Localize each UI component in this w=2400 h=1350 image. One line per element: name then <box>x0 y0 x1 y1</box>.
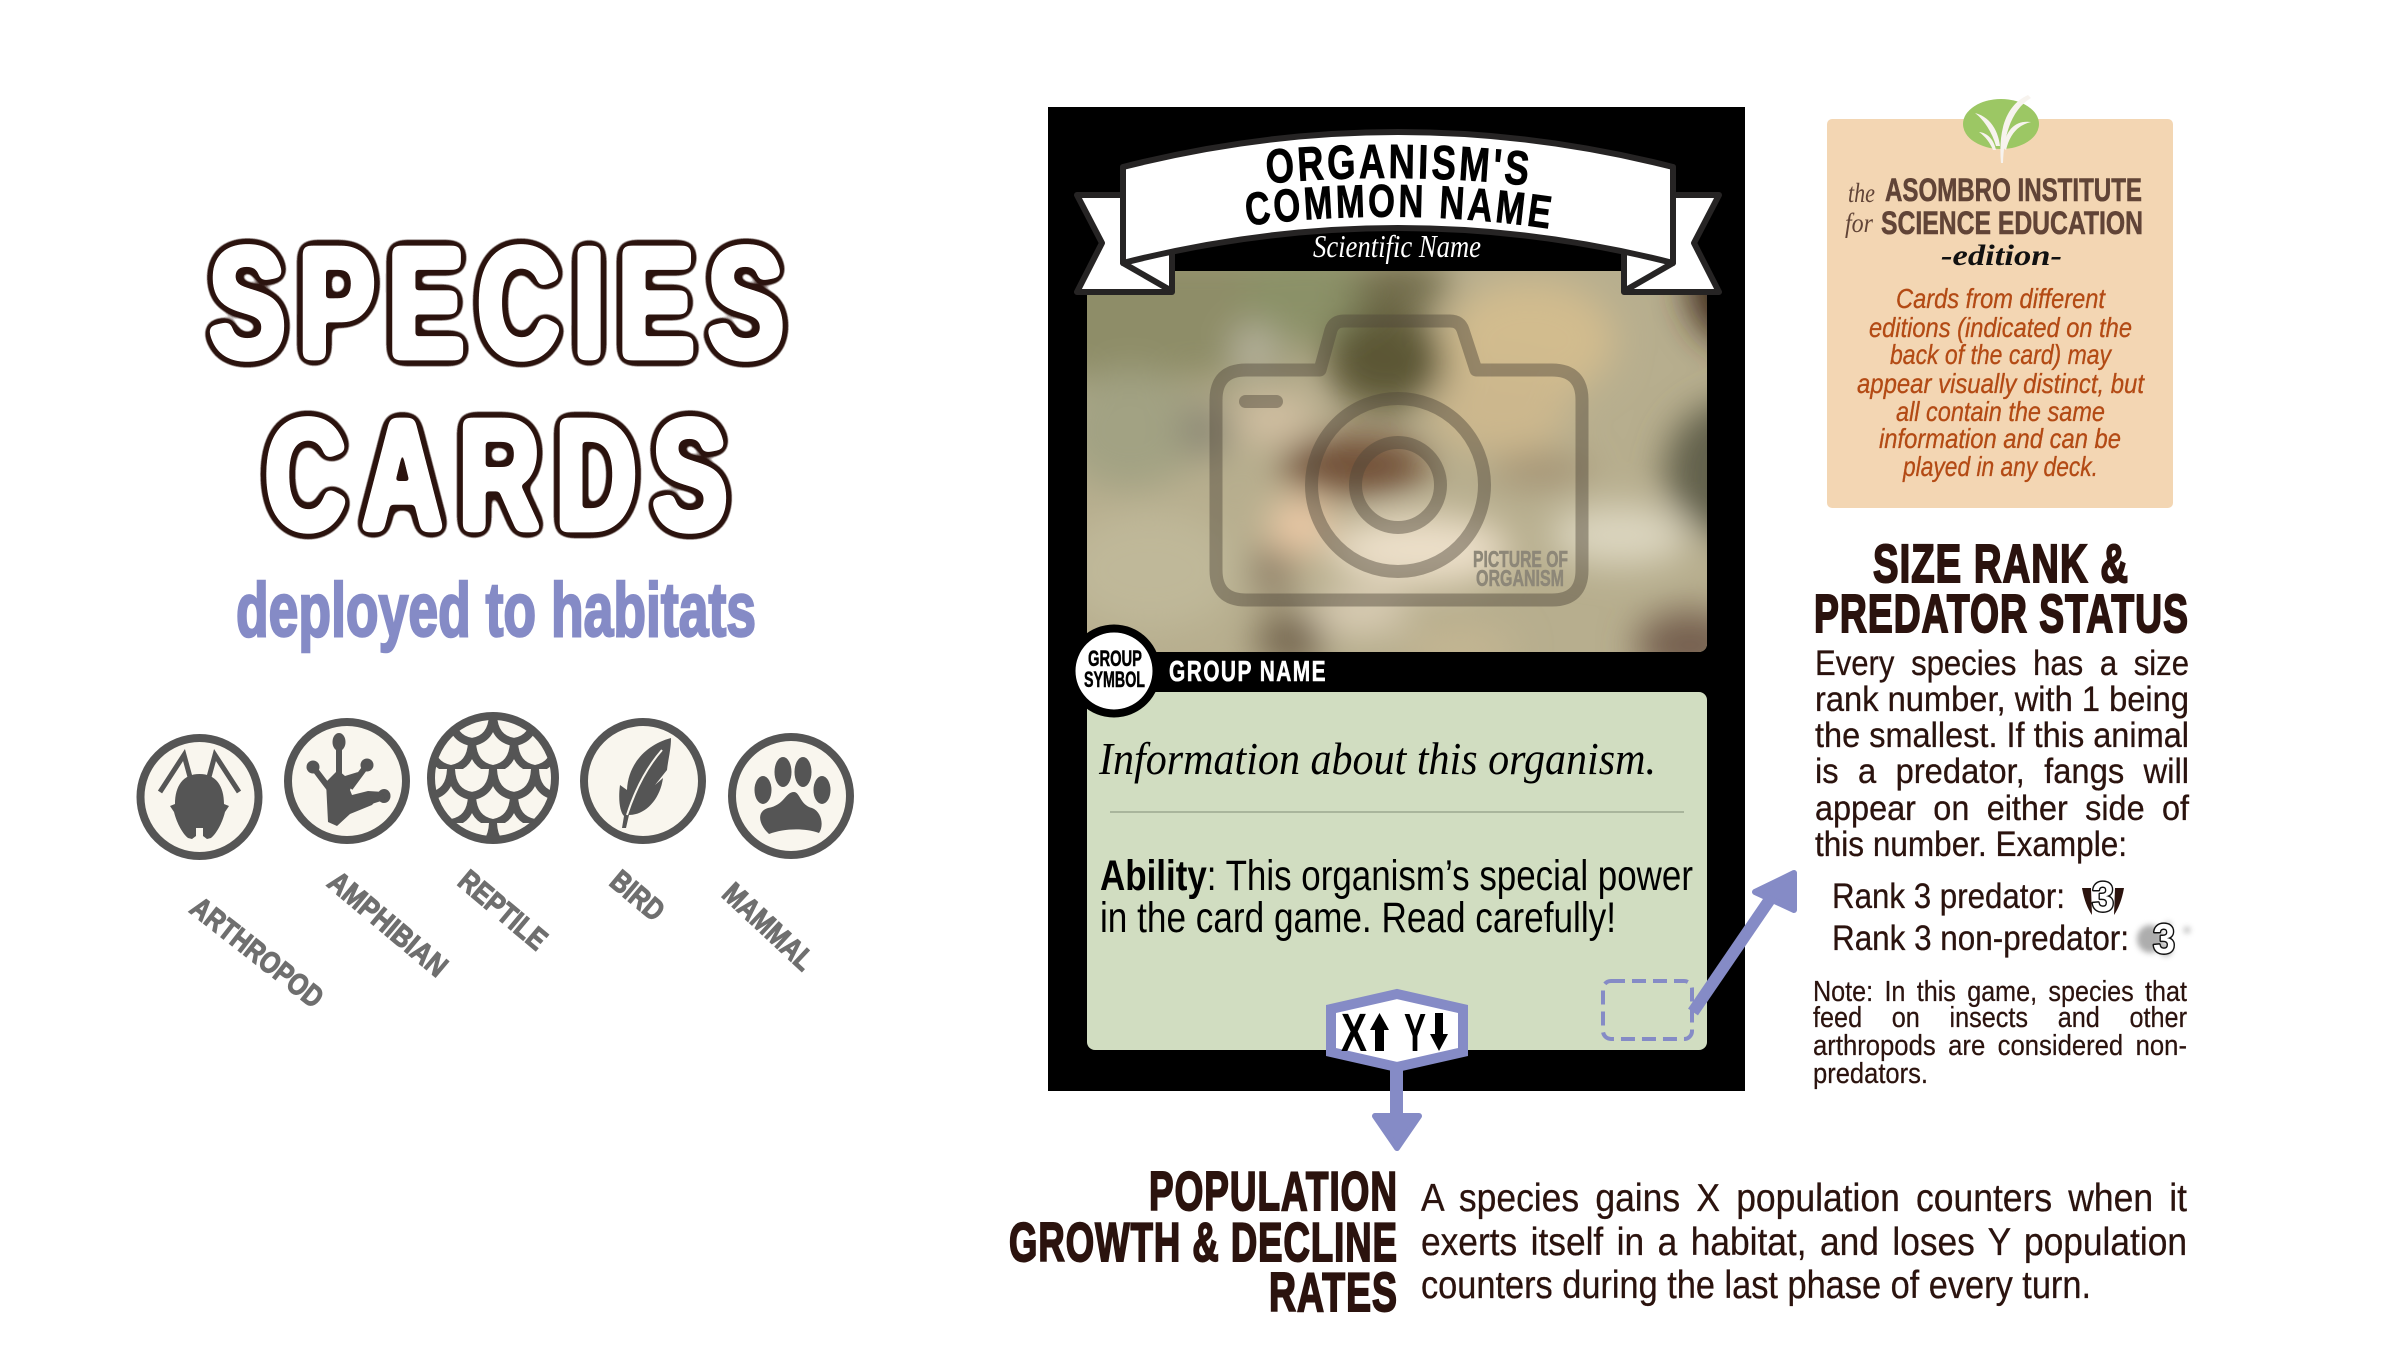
heading: size rank: SIZE RANK & <box>1873 534 2129 594</box>
label: bird: BIRD <box>603 864 671 928</box>
icon: up arrow <box>1370 1013 1389 1051</box>
title: species cards: SPECIES <box>209 216 797 391</box>
ability text <box>1100 852 1693 942</box>
institute name: ASOMBRO INSTITUTE <box>1885 172 2142 208</box>
photo caption: ORGANISM <box>1476 565 1564 591</box>
population badge: X <box>1341 1003 1367 1063</box>
group symbol: GROUP <box>1088 646 1142 671</box>
size rank body: rank number, with 1 being <box>1815 680 2189 719</box>
title: species cards: CARDS <box>265 388 743 563</box>
population body <box>1421 1177 2187 1307</box>
label: reptile: REPTILE <box>452 864 553 957</box>
note: predators. <box>1813 1058 1928 1090</box>
icon: rank 3 with smudge <box>2137 915 2190 962</box>
info panel <box>1087 692 1707 1050</box>
population badge: Y <box>1404 1003 1426 1063</box>
common name: COMMON NAME <box>1246 184 1552 229</box>
icon: reptile scales <box>427 712 559 844</box>
edition note: played in any deck. <box>1902 451 2098 482</box>
heading: population growth <box>1009 1160 1398 1323</box>
institute name <box>1845 172 2143 241</box>
size rank body: appear on either side of <box>1815 789 2189 828</box>
icon: sprout logo <box>1963 95 2039 163</box>
size rank body <box>1815 644 2189 864</box>
note: arthropods are considered non- <box>1813 1030 2187 1062</box>
population body: counters during the last phase of every turn. <box>1421 1264 2091 1307</box>
scientific name: Scientific Name <box>1313 228 1481 264</box>
heading: population growth: POPULATION <box>1149 1160 1398 1222</box>
icon: fangs with rank 3: 3 <box>2092 873 2114 920</box>
size rank body: this number. Example: <box>1815 825 2127 864</box>
banner <box>1077 132 1719 292</box>
population badge <box>1331 994 1463 1067</box>
common name <box>1246 144 1552 229</box>
common name: ORGANISM'S <box>1266 144 1528 186</box>
institute name: the <box>1848 178 1875 208</box>
note: Note: In this game, species that <box>1813 976 2187 1008</box>
rank examples: Rank 3 predator: <box>1832 877 2065 916</box>
photo placeholder <box>1087 271 1707 652</box>
title: species cards <box>209 216 797 563</box>
heading: size rank <box>1814 534 2189 644</box>
photo caption <box>1474 550 1568 586</box>
banner tails <box>1077 195 1172 292</box>
label: mammal: MAMMAL <box>716 877 820 977</box>
edition note: information and can be <box>1879 423 2121 454</box>
group icons row <box>140 712 850 856</box>
rank examples: Rank 3 non-predator: <box>1832 919 2129 958</box>
panel: species card <box>1048 107 1745 1091</box>
edition note: appear visually distinct, but <box>1857 368 2145 399</box>
edition: -edition- <box>1941 239 2062 272</box>
icon: arthropod <box>140 738 258 856</box>
icon: amphibian foot <box>288 722 406 840</box>
rank examples <box>1832 873 2190 962</box>
group symbol <box>1072 628 1156 714</box>
photo caption: PICTURE OF <box>1473 546 1568 572</box>
icon: rank 3 with smudge: 3 <box>2153 915 2175 962</box>
institute name: SCIENCE EDUCATION <box>1881 205 2143 241</box>
note <box>1813 976 2187 1090</box>
label: arthropod: ARTHROPOD <box>184 891 329 1015</box>
edition note: editions (indicated on the <box>1869 312 2132 343</box>
ability text: Ability: This organism’s special power <box>1100 852 1693 900</box>
icon: down arrow <box>1430 1013 1448 1051</box>
size rank body: is a predator, fangs will <box>1815 752 2189 791</box>
group symbol: SYMBOL <box>1084 667 1145 692</box>
icon: camera <box>1216 321 1582 600</box>
banner main ribbon <box>1123 132 1673 263</box>
arrow down to population <box>1375 1065 1419 1148</box>
size rank body: Every species has a size <box>1815 644 2189 683</box>
icon: mammal paw <box>732 737 850 855</box>
group name: GROUP NAME <box>1169 656 1327 688</box>
heading: size rank: PREDATOR STATUS <box>1814 584 2189 644</box>
dashed rank box <box>1603 981 1692 1039</box>
edition note: Cards from different <box>1896 283 2106 314</box>
edition note: back of the card) may <box>1890 339 2113 370</box>
heading: population growth: RATES <box>1269 1261 1398 1323</box>
institute name: for <box>1845 208 1873 238</box>
icon: fangs with rank 3 <box>2082 873 2124 920</box>
arrow to size rank <box>1693 873 1794 1012</box>
panel: asombro edition <box>1827 95 2173 508</box>
ability text: in the card game. Read carefully! <box>1100 894 1616 942</box>
icon: bird feather <box>584 722 702 840</box>
size rank body: the smallest. If this animal <box>1815 716 2189 755</box>
edition note <box>1857 283 2145 482</box>
label: amphibian: AMPHIBIAN <box>321 865 454 984</box>
info text: Information about this organism. <box>1098 733 1656 784</box>
subtitle: deployed to habitats <box>236 568 756 653</box>
note: feed on insects and other <box>1813 1002 2187 1034</box>
population body: A species gains X population counters when it <box>1421 1177 2187 1220</box>
heading: population growth: GROWTH & DECLINE <box>1009 1211 1398 1273</box>
edition note: all contain the same <box>1896 396 2105 427</box>
population body: exerts itself in a habitat, and loses Y population <box>1421 1221 2187 1264</box>
